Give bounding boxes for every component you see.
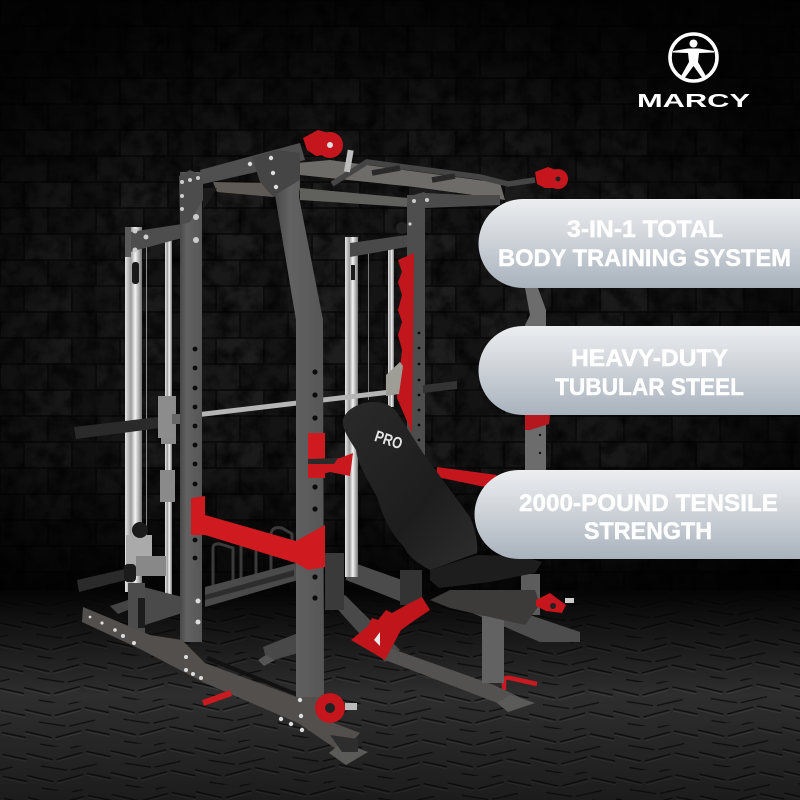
weight plate storage [205, 528, 298, 607]
callout: heavy-duty tubular steel: TUBULAR STEEL [555, 374, 744, 401]
power rack: left chrome pulley tower [125, 224, 182, 595]
background: brick wall [0, 0, 800, 640]
power rack: front base rail [82, 607, 368, 765]
callout: 3-in-1 total body training system [479, 199, 800, 288]
far right post [525, 288, 546, 470]
Marcy logo [637, 34, 750, 111]
callout: 2000-pound tensile strength: 2000-POUND TENSILE [519, 490, 778, 517]
barbell [74, 362, 457, 439]
right pulley [535, 167, 556, 188]
bench frame and base [332, 595, 400, 662]
callout: heavy-duty tubular steel: HEAVY-DUTY [571, 345, 728, 372]
rear crossbars [213, 182, 273, 197]
wordmark: MARCY [637, 91, 750, 111]
red rack accents [191, 433, 537, 703]
power rack: lower left frame [77, 556, 182, 641]
rear right post [407, 195, 425, 485]
power rack: top beam [200, 143, 305, 197]
callout: 2000-pound tensile strength [475, 470, 800, 559]
power rack: rear structure [213, 160, 580, 666]
bench logo: PRO [372, 428, 404, 453]
seat pad [430, 555, 542, 588]
callout: heavy-duty tubular steel [479, 326, 800, 415]
rear white upright [345, 237, 358, 577]
callout: 3-in-1 total body training system: 3-IN-1 TOTAL [567, 216, 723, 243]
red incline bracket [351, 597, 430, 660]
red J-hook rack [397, 253, 414, 433]
lower right pulley [536, 593, 566, 613]
callout: 2000-pound tensile strength: STRENGTH [584, 518, 712, 545]
lower front pulley [315, 693, 345, 723]
icon: vitruvian figure in circle [670, 34, 717, 81]
adjustable bench [325, 402, 542, 712]
backrest pad [343, 402, 477, 570]
pull-up bar [332, 162, 535, 184]
power rack: left front post [179, 170, 217, 642]
rear base rails [346, 560, 402, 602]
callout: 3-in-1 total body training system: BODY TRAINING SYSTEM [498, 245, 791, 272]
power rack: main front post [275, 180, 324, 697]
top pulley [303, 130, 332, 156]
background: tread plate floor [0, 590, 800, 800]
red pulleys and pull-up bar [303, 130, 574, 723]
